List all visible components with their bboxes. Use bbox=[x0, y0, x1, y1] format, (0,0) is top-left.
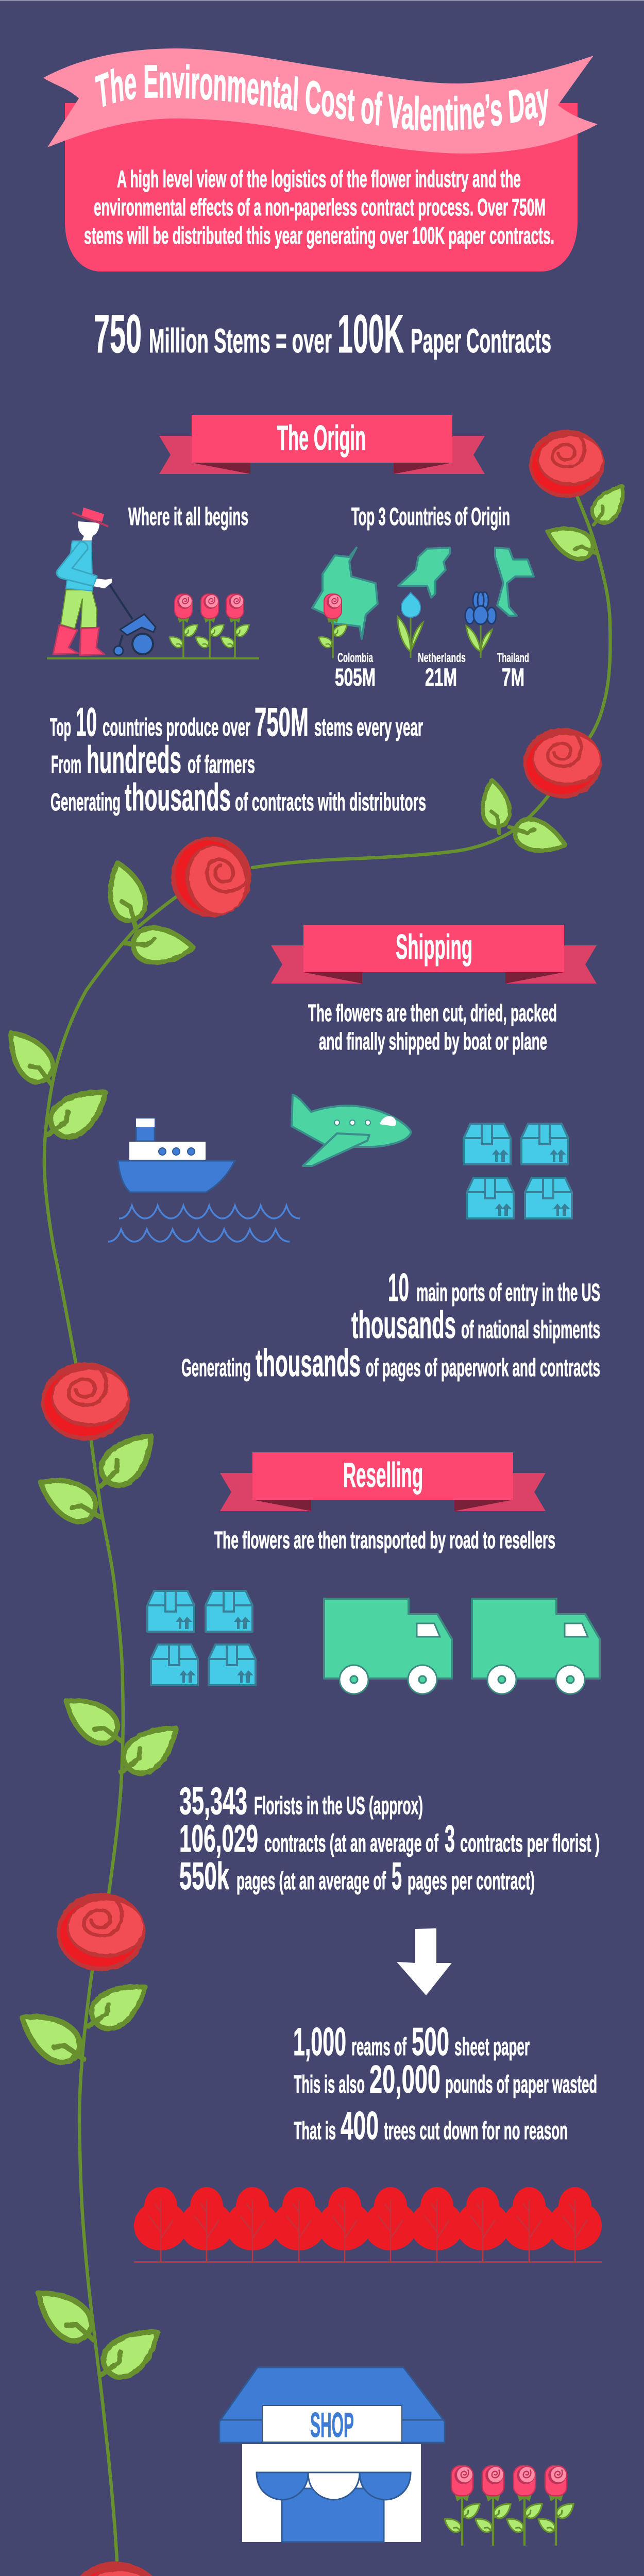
shipping intro bbox=[308, 999, 557, 1055]
country stats: 21M bbox=[425, 664, 457, 691]
paper facts: sheet paper bbox=[454, 2033, 530, 2061]
label: where it all begins: Where it all begins bbox=[128, 503, 248, 531]
paper facts: 1,000 bbox=[293, 2020, 346, 2064]
reselling facts: pages (at an average of bbox=[236, 1868, 386, 1895]
illustration: farmer with cultivator bbox=[47, 507, 259, 658]
heading ribbon: The Origin: The Origin bbox=[277, 418, 366, 457]
icon: rose bbox=[316, 594, 350, 658]
origin facts: of contracts with distributors bbox=[235, 789, 426, 816]
origin facts: hundreds bbox=[87, 738, 181, 781]
paper facts: This is also bbox=[294, 2071, 365, 2098]
origin facts: From bbox=[51, 751, 81, 778]
map: Colombia bbox=[312, 548, 378, 639]
heading ribbon: Reselling: Reselling bbox=[343, 1455, 423, 1495]
map: Thailand bbox=[495, 548, 534, 616]
shipping facts: thousands bbox=[351, 1303, 456, 1346]
paper facts: 400 bbox=[341, 2104, 379, 2148]
reselling facts: contracts (at an average of bbox=[264, 1830, 439, 1857]
headline stat bbox=[94, 304, 551, 364]
country stats: 505M bbox=[335, 664, 376, 691]
headline stat: 100K bbox=[337, 304, 404, 364]
reselling facts: 35,343 bbox=[179, 1780, 247, 1822]
heading ribbon: Shipping: Shipping bbox=[396, 927, 472, 967]
illustration: flower shop bbox=[219, 2367, 445, 2542]
origin facts: of farmers bbox=[188, 751, 255, 778]
reselling facts: Florists in the US (approx) bbox=[254, 1792, 423, 1820]
paper facts: 500 bbox=[412, 2020, 449, 2064]
origin facts: stems every year bbox=[314, 714, 423, 741]
paper facts: 20,000 bbox=[369, 2058, 440, 2102]
country stats: Netherlands bbox=[418, 651, 466, 665]
waves bbox=[108, 1206, 300, 1242]
origin facts: 750M bbox=[255, 699, 309, 744]
icon: tulip bbox=[398, 592, 423, 658]
reselling facts bbox=[179, 1780, 600, 1897]
reselling facts: 106,029 bbox=[179, 1817, 258, 1860]
shipping facts bbox=[181, 1266, 600, 1384]
tree row bbox=[134, 2187, 602, 2262]
icon: parcels bbox=[464, 1124, 572, 1218]
country stats: Thailand bbox=[497, 651, 529, 665]
reselling facts: pages per contract) bbox=[408, 1868, 535, 1895]
shipping facts: 10 bbox=[388, 1266, 409, 1310]
label: top 3 countries: Top 3 Countries of Origin bbox=[351, 503, 510, 531]
country stats: 7M bbox=[502, 664, 524, 691]
origin facts: countries produce over bbox=[103, 714, 250, 741]
hero panel bbox=[43, 48, 598, 272]
title ribbon bbox=[43, 48, 598, 154]
paper facts: That is bbox=[294, 2117, 336, 2145]
headline stat: 750 bbox=[94, 304, 142, 364]
map: Netherlands bbox=[398, 548, 450, 598]
reselling facts: 3 bbox=[445, 1817, 455, 1860]
icon: iris bbox=[465, 592, 496, 658]
shipping facts: Generating bbox=[181, 1354, 251, 1382]
intro text bbox=[84, 165, 554, 249]
reselling facts: 550k bbox=[179, 1855, 229, 1897]
origin facts bbox=[50, 699, 426, 819]
country stats bbox=[335, 651, 529, 691]
intro box bbox=[65, 103, 578, 272]
arrow bbox=[397, 1928, 452, 1995]
origin facts: 10 bbox=[76, 699, 97, 744]
country stats: Colombia bbox=[337, 651, 374, 665]
icon: four roses bbox=[442, 2466, 577, 2546]
origin facts: thousands bbox=[125, 776, 231, 819]
maps: top 3 countries bbox=[312, 548, 534, 658]
origin facts: Generating bbox=[50, 789, 121, 816]
heading ribbon: The Origin bbox=[159, 415, 485, 474]
reselling facts: 5 bbox=[392, 1855, 402, 1897]
headline stat: Million Stems = over bbox=[149, 321, 332, 360]
shipping facts: thousands bbox=[256, 1342, 361, 1384]
origin facts: Top bbox=[50, 714, 71, 741]
heading ribbon: Shipping bbox=[271, 925, 597, 984]
icon: plane bbox=[292, 1095, 411, 1166]
icon: ship bbox=[118, 1118, 235, 1192]
paper facts bbox=[293, 2020, 597, 2148]
title: The Environmental Cost of Valentine’s Day bbox=[95, 64, 548, 131]
heading ribbon: Reselling bbox=[220, 1452, 546, 1511]
paper facts: reams of bbox=[351, 2033, 407, 2061]
illustration: flower shop: SHOP bbox=[310, 2405, 354, 2445]
icon: parcels bbox=[147, 1591, 256, 1685]
icon: trucks bbox=[324, 1599, 600, 1694]
